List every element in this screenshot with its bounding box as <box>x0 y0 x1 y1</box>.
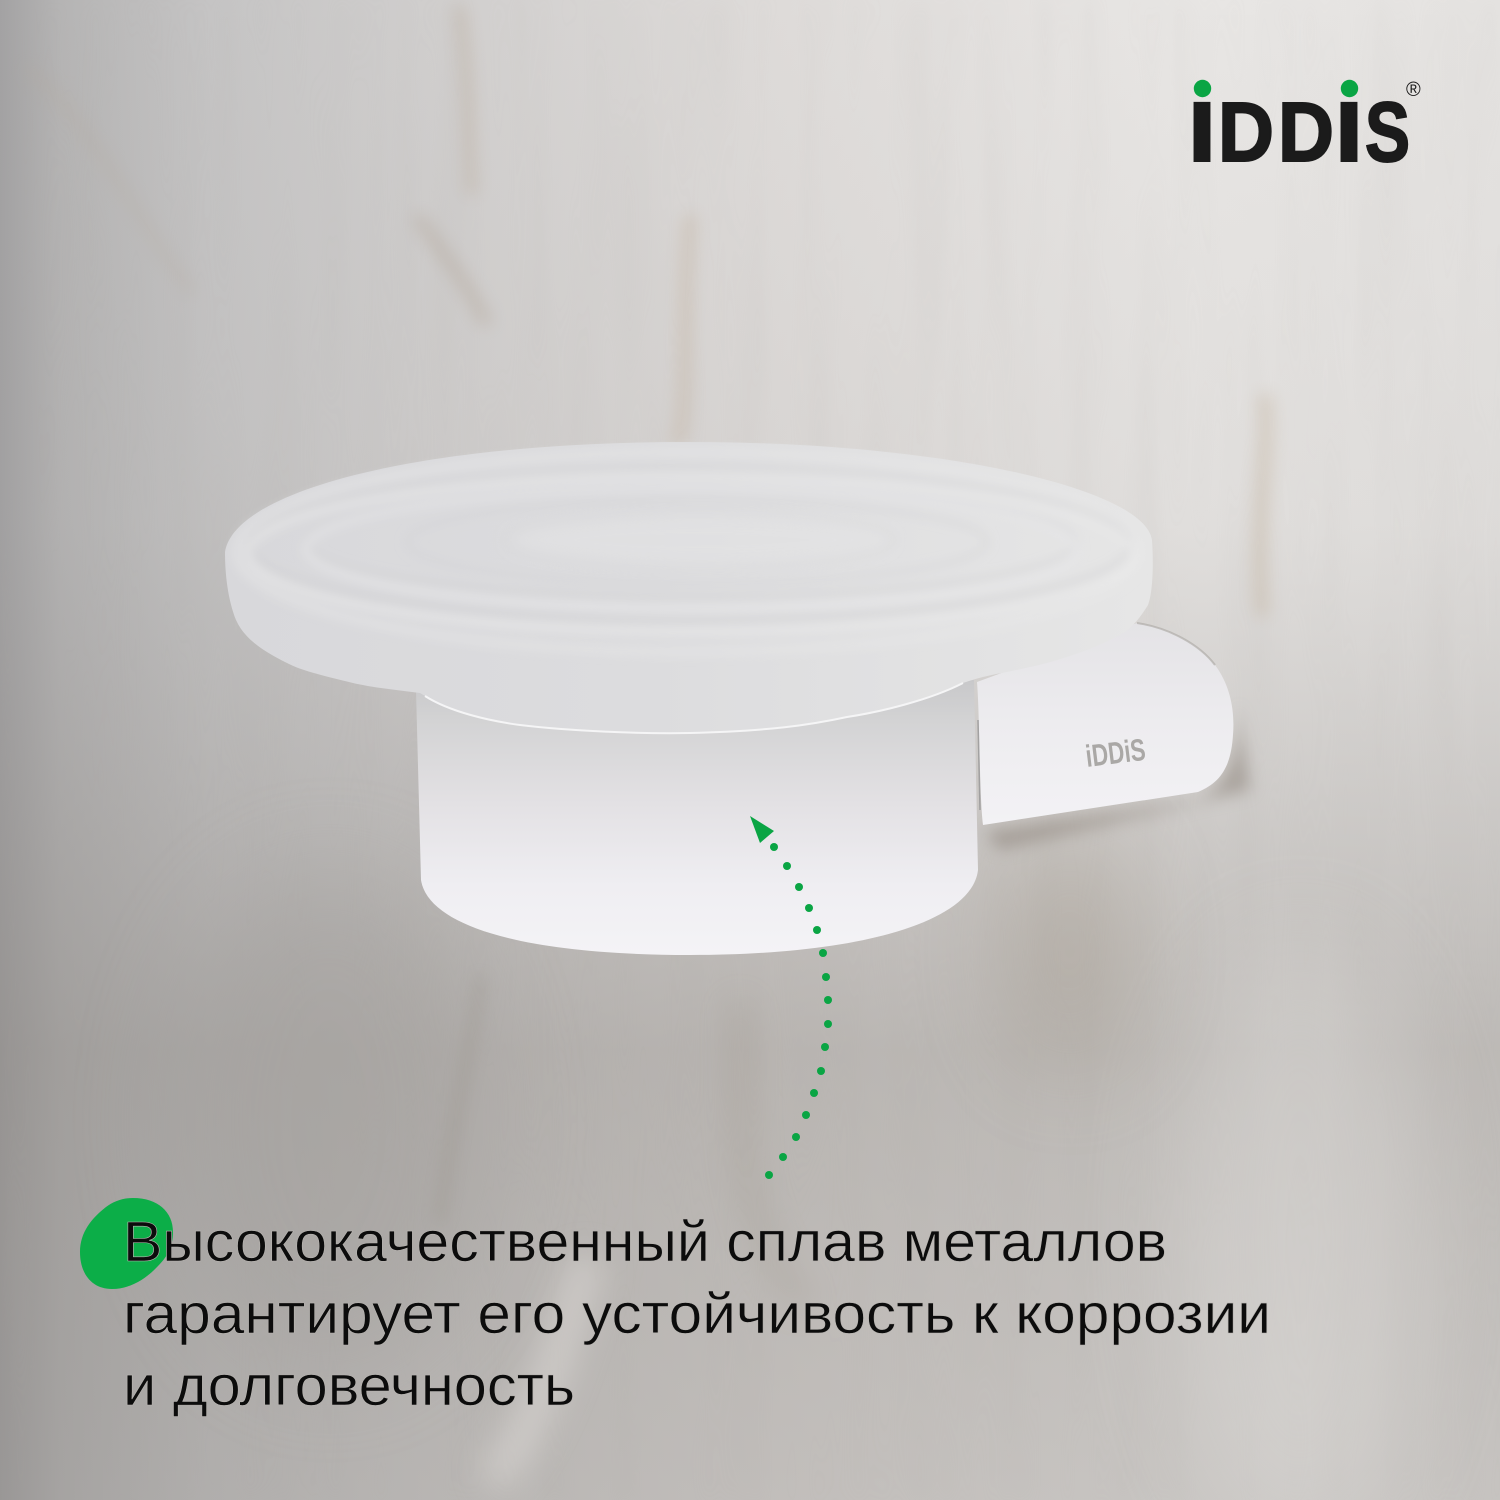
logo: IDDIS: ® <box>1406 79 1421 101</box>
logo: IDDIS: S <box>1365 85 1410 179</box>
engraved logo: iDDiS <box>1084 732 1147 774</box>
wall bracket <box>977 623 1233 825</box>
logo: IDDIS: D <box>1278 85 1334 179</box>
green blob accent <box>80 1198 173 1289</box>
logo: IDDIS: D <box>1218 85 1274 179</box>
logo: IDDIS: I <box>1188 85 1216 179</box>
caption text: и долговечность <box>123 1354 575 1418</box>
caption text: Высококачественный сплав металлов <box>123 1210 1167 1274</box>
shadow on wall <box>985 700 1250 850</box>
logo: IDDIS <box>1188 79 1421 179</box>
caption text <box>123 1210 1271 1418</box>
cup holder <box>416 680 978 955</box>
dotted arrow <box>750 816 832 1179</box>
caption text: гарантирует его устойчивость к коррозии <box>123 1282 1271 1346</box>
product: soap dish <box>225 442 1250 955</box>
arrowhead <box>750 816 774 843</box>
logo: IDDIS: I <box>1335 85 1363 179</box>
frosted glass dish <box>225 442 1153 733</box>
